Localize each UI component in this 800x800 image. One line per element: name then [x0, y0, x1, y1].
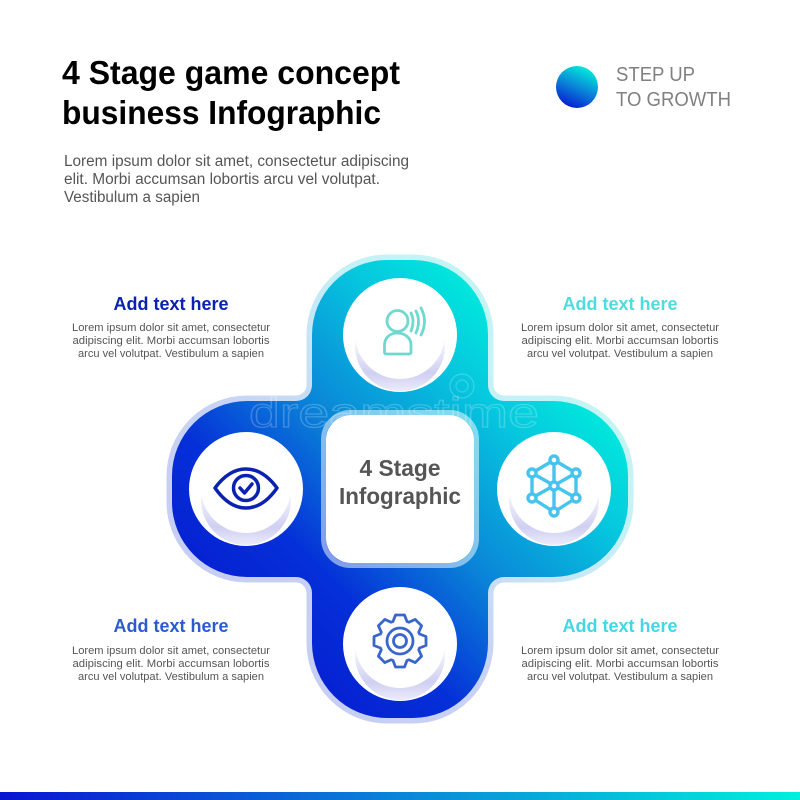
- title: 4 Stage game concept: [62, 54, 400, 91]
- intro text block: [64, 153, 409, 206]
- text block: top right: adipiscing elit. Morbi accumsan lobortis: [522, 335, 719, 347]
- title: business Infographic: [62, 94, 381, 131]
- center panel: 4 Stage: [360, 455, 440, 481]
- text block: bottom right: arcu vel volutpat. Vestibulum a sapien: [527, 671, 713, 683]
- icon: gear: [374, 615, 426, 667]
- text block: bottom left: [72, 615, 270, 683]
- icon: hexagon network: [528, 456, 580, 516]
- center panel: Infographic: [339, 483, 461, 509]
- cross halo: [172, 260, 628, 718]
- left disc with eye icon: [189, 432, 303, 546]
- icon: person with sound waves: [384, 308, 424, 354]
- right disc with network icon: [497, 432, 611, 546]
- tagline: STEP UP: [616, 63, 695, 86]
- icon: eye with check: [215, 469, 277, 508]
- text block: bottom right: [521, 615, 719, 683]
- text block: top right: Lorem ipsum dolor sit amet, consectetur: [521, 322, 719, 334]
- text block: bottom left: Add text here: [114, 615, 228, 636]
- text block: top left: Lorem ipsum dolor sit amet, consectetur: [72, 322, 270, 334]
- tagline: TO GROWTH: [616, 88, 731, 111]
- intro text block: Lorem ipsum dolor sit amet, consectetur adipiscing: [64, 153, 409, 170]
- intro text block: elit. Morbi accumsan lobortis arcu vel volutpat.: [64, 171, 380, 188]
- watermark: dreamstime: [249, 389, 539, 436]
- text block: top right: Add text here: [562, 293, 678, 314]
- icon: gradient ball: [556, 66, 598, 108]
- text block: top left: adipiscing elit. Morbi accumsan lobortis: [72, 335, 270, 347]
- top disc with person icon: [343, 278, 457, 392]
- tagline: [616, 63, 731, 111]
- text block: bottom right: adipiscing elit. Morbi accumsan lobortis: [522, 658, 719, 670]
- text block: top right: [521, 293, 719, 360]
- watermark: [249, 374, 539, 436]
- bottom gradient bar: [0, 792, 800, 800]
- cross diagram: [172, 260, 628, 718]
- text block: bottom left: arcu vel volutpat. Vestibulum a sapien: [78, 671, 264, 683]
- center panel: [324, 412, 476, 566]
- text block: bottom right: Lorem ipsum dolor sit amet, consectetur: [521, 645, 719, 657]
- text block: bottom right: Add text here: [562, 615, 678, 636]
- title: [62, 54, 400, 131]
- cross body: [172, 260, 628, 718]
- text block: top left: Add text here: [114, 293, 228, 314]
- text block: bottom left: Lorem ipsum dolor sit amet, consectetur: [72, 645, 270, 657]
- text block: bottom left: adipiscing elit. Morbi accumsan lobortis: [72, 658, 270, 670]
- text block: top left: arcu vel volutpat. Vestibulum a sapien: [78, 348, 264, 360]
- intro text block: Vestibulum a sapien: [64, 189, 200, 206]
- text block: top right: arcu vel volutpat. Vestibulum a sapien: [527, 348, 713, 360]
- bottom disc with gear icon: [343, 587, 457, 701]
- text block: top left: [72, 293, 270, 360]
